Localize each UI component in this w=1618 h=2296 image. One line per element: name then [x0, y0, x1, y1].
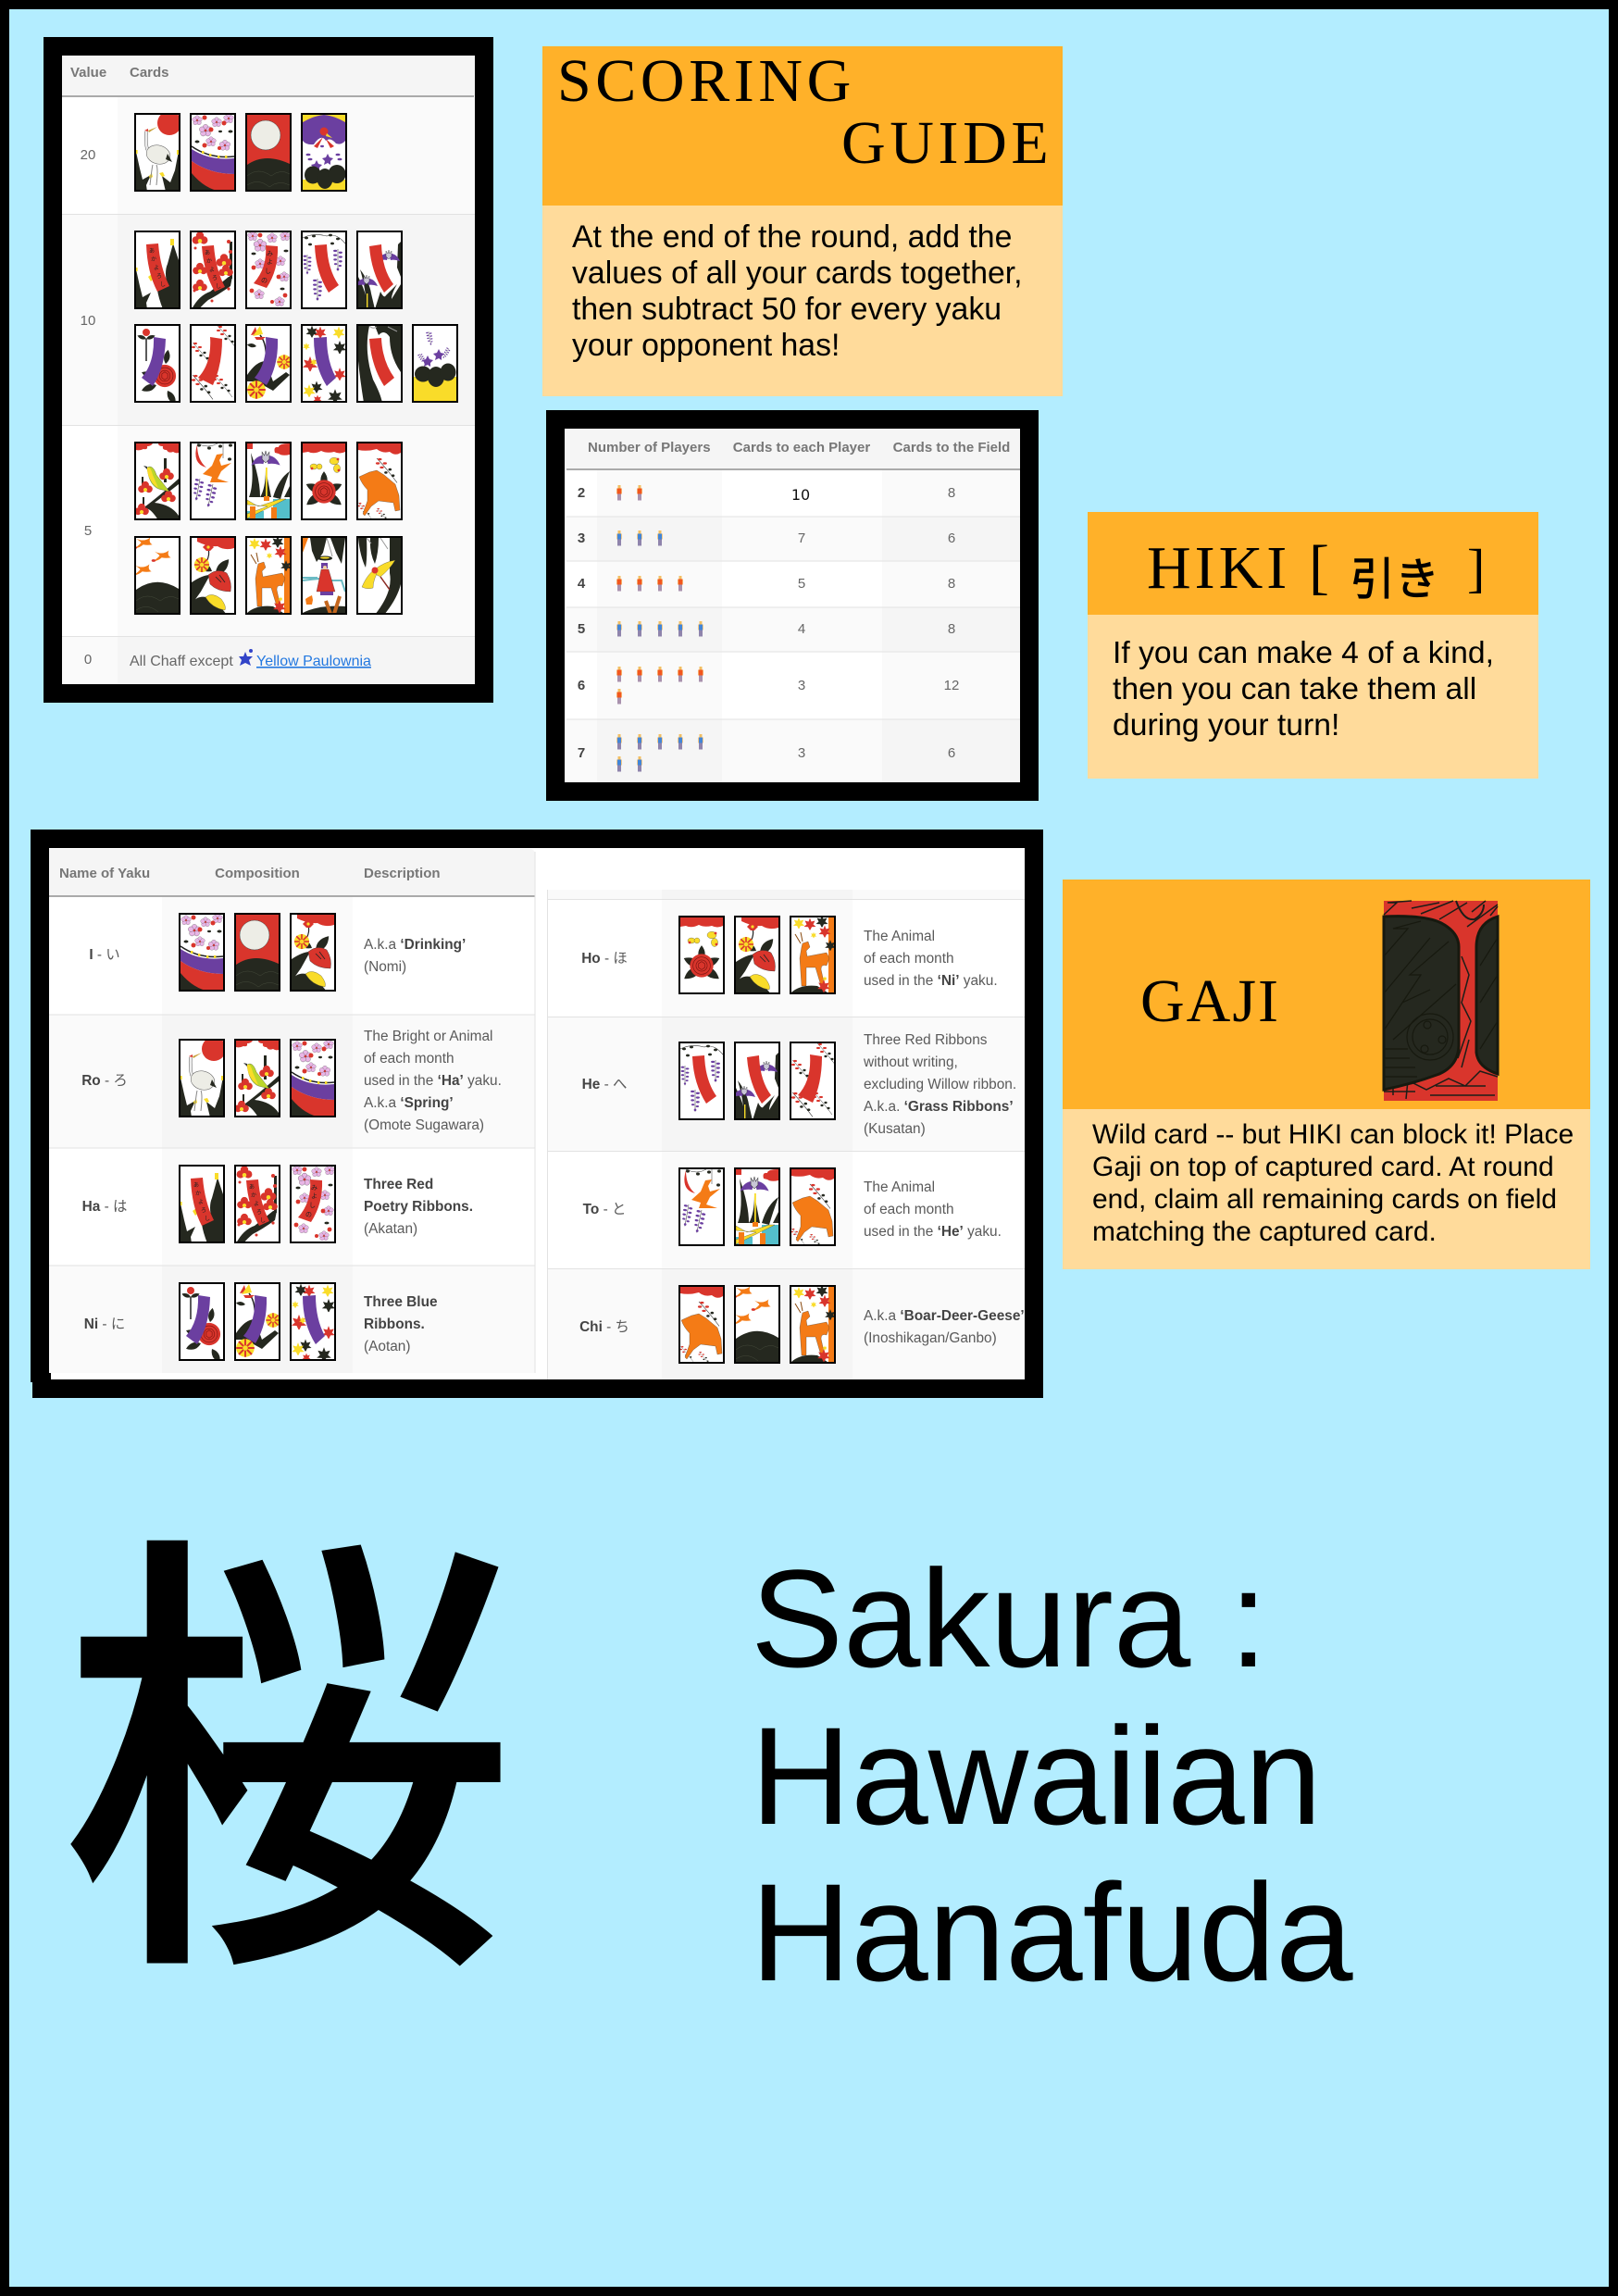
yaku Ha	[82, 1165, 473, 1243]
yaku Ha: (Akatan)	[364, 1221, 417, 1237]
text: scoring explanation: At the end of the round, add the	[572, 219, 1012, 255]
panel: scoring guide	[542, 46, 1063, 396]
row: 5 players	[578, 621, 955, 637]
heading: gaji: GAJI	[1140, 967, 1280, 1035]
heading: hiki: HIKI	[1147, 534, 1290, 602]
yaku Ho: Ho - ほ	[581, 951, 628, 967]
yaku To: To - と	[583, 1202, 626, 1217]
title: Sakura Hawaiian Hanafuda: Hawaiian	[751, 1698, 1322, 1853]
title: scoring guide	[557, 47, 1052, 177]
yaku Ro: of each month	[364, 1051, 454, 1067]
row: value 10: 10	[81, 313, 95, 329]
text: gaji explanation	[1092, 1119, 1574, 1247]
text: scoring explanation: your opponent has!	[572, 328, 840, 363]
heading: hiki: [	[1309, 533, 1329, 601]
row: 5 players: 4	[798, 621, 805, 637]
row: value 5	[62, 426, 475, 637]
row: 4 players: 8	[948, 576, 955, 592]
text: gaji explanation: Wild card -- but HIKI can block it! Place	[1092, 1119, 1574, 1150]
row: 3 players	[578, 530, 955, 546]
heading: hiki	[1147, 533, 1485, 607]
table header: Number of Players	[588, 440, 711, 455]
yaku Ha: Ha - は	[82, 1199, 127, 1215]
row: 2 players: 2	[578, 485, 585, 501]
yaku Chi: A.k.a ‘Boar-Deer-Geese’	[864, 1308, 1025, 1324]
left table header: Name of Yaku	[59, 866, 150, 881]
row: 4 players: 5	[798, 576, 805, 592]
row: 7 players: 3	[798, 745, 805, 761]
right table shading	[547, 890, 1025, 1379]
yaku He: without writing,	[863, 1054, 958, 1070]
row: value 20	[62, 97, 475, 215]
column shading and row lines	[565, 470, 1020, 782]
yaku Ho	[581, 915, 998, 994]
row: value 5: 5	[84, 523, 92, 539]
yaku Ro: used in the ‘Ha’ yaku.	[364, 1073, 502, 1089]
yaku Ho: of each month	[864, 951, 954, 967]
yaku To	[583, 1167, 1002, 1247]
panel: hiki	[1088, 512, 1538, 779]
row: 2 players	[578, 485, 955, 504]
row: 6 players: 6	[578, 678, 585, 693]
table header: Cards to each Player	[733, 440, 870, 455]
text: scoring explanation	[572, 219, 1023, 363]
text: gaji explanation: end, claim all remaining cards on field	[1092, 1184, 1557, 1215]
text: scoring explanation: values of all your cards together,	[572, 256, 1023, 291]
panel: card values table	[44, 37, 493, 703]
yaku He: (Kusatan)	[864, 1121, 926, 1137]
yaku I: A.k.a ‘Drinking’	[364, 937, 466, 953]
left table shading	[49, 852, 535, 1373]
yaku He: excluding Willow ribbon.	[864, 1077, 1016, 1092]
yaku He	[582, 1032, 1016, 1137]
yaku Ro	[81, 1029, 502, 1133]
row: 6 players	[578, 667, 959, 704]
row: value 0 chaff note: 0	[84, 652, 92, 668]
row: 7 players: 7	[578, 745, 585, 761]
title: Sakura Hawaiian Hanafuda: Hanafuda	[751, 1854, 1353, 2010]
row: 5 players: 8	[948, 621, 955, 637]
yaku Ni: Ni - に	[84, 1316, 125, 1332]
yaku To: used in the ‘He’ yaku.	[864, 1224, 1002, 1240]
icon: gaji card	[1384, 901, 1498, 1101]
title: scoring guide: GUIDE	[841, 109, 1052, 177]
yaku Ho: used in the ‘Ni’ yaku.	[864, 973, 998, 989]
left table header: Composition	[215, 866, 300, 881]
left table header	[49, 849, 535, 897]
yaku I	[89, 913, 466, 992]
row: 5 players: 5	[578, 621, 585, 637]
yaku Ni: (Aotan)	[364, 1339, 410, 1354]
left table header: Description	[364, 866, 441, 881]
row: 7 players	[578, 734, 955, 772]
yaku He: He - へ	[582, 1077, 627, 1092]
yaku He: A.k.a. ‘Grass Ribbons’	[864, 1099, 1014, 1115]
text: hiki explanation: then you can take them all	[1113, 671, 1476, 706]
yaku Ro: A.k.a ‘Spring’	[364, 1095, 454, 1111]
row: value 0 chaff note	[62, 637, 475, 684]
title: scoring guide: SCORING	[557, 47, 855, 115]
right yaku table	[547, 890, 1025, 1379]
heading: hiki: 引き	[1350, 543, 1439, 607]
row: 2 players: 8	[948, 485, 955, 501]
row: 4 players	[578, 576, 955, 592]
row: 3 players: 3	[578, 530, 585, 546]
panel: deal table by number of players	[546, 410, 1039, 801]
panel: yaku table	[31, 830, 1043, 1398]
left yaku table	[49, 849, 535, 1373]
table header: value, cards	[62, 56, 475, 97]
yaku He: Three Red Ribbons	[864, 1032, 988, 1048]
panel: gaji	[1063, 880, 1590, 1269]
row: 6 players: 3	[798, 678, 805, 693]
text: hiki explanation	[1113, 635, 1494, 742]
yaku Ro: Ro - ろ	[81, 1073, 128, 1089]
table header: value, cards: Cards	[130, 65, 169, 81]
yaku Ho: The Animal	[864, 929, 935, 944]
yaku Ni	[84, 1282, 438, 1364]
yaku Chi: Chi - ち	[579, 1319, 629, 1335]
row: value 0 chaff note: Yellow Paulownia	[256, 654, 371, 669]
heading: hiki: ]	[1467, 538, 1485, 598]
row: value 10	[62, 215, 475, 426]
title: Sakura Hawaiian Hanafuda	[751, 1541, 1353, 2010]
yaku Ha: Three Red	[364, 1177, 433, 1192]
row: 6 players: 12	[944, 678, 959, 693]
text: hiki explanation: during your turn!	[1113, 707, 1339, 742]
row: 3 players: 7	[798, 530, 805, 546]
yaku Ha: Poetry Ribbons.	[364, 1199, 473, 1215]
row: 7 players: 6	[948, 745, 955, 761]
table header	[565, 429, 1020, 470]
kanji: sakura: 桜	[62, 1401, 512, 2053]
text: gaji explanation: Gaji on top of captured card. At round	[1092, 1152, 1554, 1182]
yaku Ro: (Omote Sugawara)	[364, 1117, 484, 1133]
table header: value, cards: Value	[70, 65, 106, 81]
row: 2 players: 10	[791, 486, 810, 504]
yaku To: of each month	[864, 1202, 954, 1217]
yaku Chi	[579, 1285, 1025, 1365]
text: hiki explanation: If you can make 4 of a kind,	[1113, 635, 1494, 670]
row: value 0 chaff note: All Chaff except	[130, 654, 233, 669]
yaku To: The Animal	[864, 1179, 935, 1195]
yaku Ni: Three Blue	[364, 1294, 438, 1310]
yaku Ni: Ribbons.	[364, 1316, 425, 1332]
row: value 20: 20	[81, 147, 95, 163]
text: gaji explanation: matching the captured card.	[1092, 1217, 1437, 1247]
yaku I: (Nomi)	[364, 959, 406, 975]
table header: Cards to the Field	[893, 440, 1010, 455]
text: scoring explanation: then subtract 50 for every yaku	[572, 292, 1002, 327]
title: Sakura Hawaiian Hanafuda: Sakura :	[751, 1541, 1268, 1696]
row: 3 players: 6	[948, 530, 955, 546]
row: 4 players: 4	[578, 576, 586, 592]
yaku I: I - い	[89, 947, 120, 963]
yaku Chi: (Inoshikagan/Ganbo)	[864, 1330, 997, 1346]
yaku Ro: The Bright or Animal	[364, 1029, 492, 1044]
